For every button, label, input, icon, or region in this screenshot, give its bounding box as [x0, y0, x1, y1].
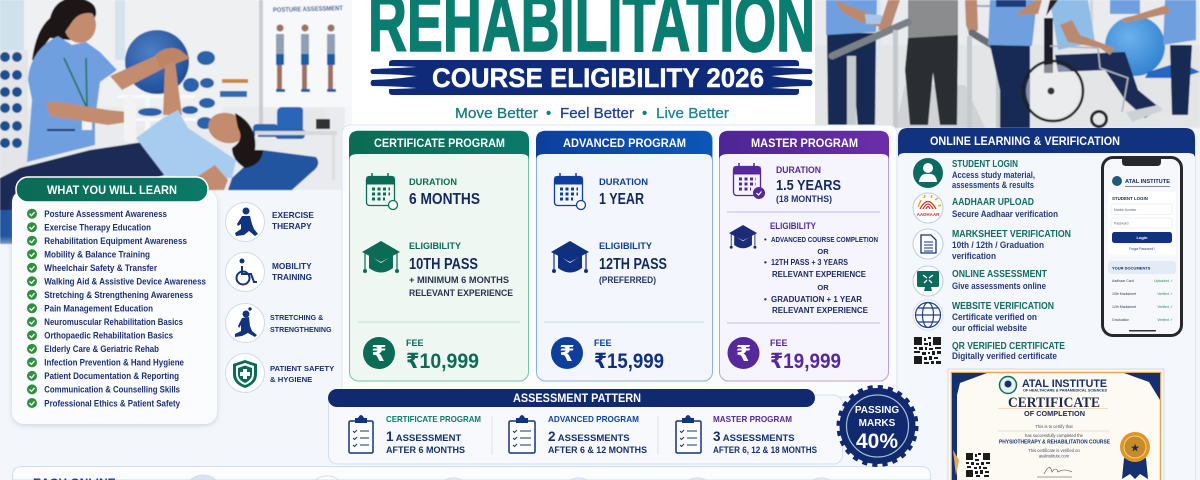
- text: duration: (18 MONTHS): [776, 194, 832, 204]
- label: exercise therapy: EXERCISE: [272, 210, 314, 220]
- phone: student login screen: [1101, 156, 1183, 337]
- text: student login: assessments & results: [952, 180, 1034, 190]
- text: duration: [409, 177, 480, 208]
- text: aadhaar upload: AADHAAR UPLOAD: [952, 197, 1034, 208]
- photo: therapist assisting a patient: [0, 0, 352, 254]
- phone: student login screen: STUDENT LOGIN: [1112, 196, 1148, 201]
- assessment: master program: MASTER PROGRAM: [713, 414, 792, 424]
- text: online assessment: ONLINE ASSESSMENT: [952, 269, 1047, 280]
- text: eligibility options: 12TH PASS + 3 YEARS: [771, 258, 849, 267]
- text: website verification: [952, 301, 1054, 333]
- text: eligibility options: •: [764, 295, 767, 304]
- heading: online learning and verification: ONLINE LEARNING & VERIFICATION: [930, 134, 1120, 148]
- patient standing: [908, 0, 958, 40]
- text: duration: DURATION: [599, 177, 648, 188]
- label: mobility training: MOBILITY: [272, 261, 312, 271]
- certificate institute name: OF HEALTHCARE & PARAMEDICAL SCIENCES: [1023, 388, 1108, 392]
- text: duration: DURATION: [409, 177, 457, 188]
- phone: student login screen: Login: [1137, 235, 1148, 240]
- list: learning topics: Walking Aid & Assistive Device Awareness: [44, 277, 206, 287]
- assessment: advanced program: [509, 414, 647, 455]
- certificate body text: atalinstitute.com: [1039, 454, 1070, 458]
- text: eligibility: + MINIMUM 6 MONTHS: [409, 275, 509, 285]
- text: aadhaar upload: [952, 197, 1058, 219]
- tagline: •: [546, 105, 551, 122]
- certificate body text: has successfully completed the: [1025, 433, 1084, 438]
- phone: student login screen: YOUR DOCUMENTS: [1112, 266, 1151, 270]
- certificate medal: ★: [1130, 442, 1140, 454]
- phone: student login screen: Forgot Password?: [1129, 247, 1155, 251]
- text: duration: DURATION: [776, 165, 821, 176]
- poster: posture assessment: POSTURE ASSESSMENT: [273, 5, 343, 14]
- text: marksheet verification: [952, 229, 1071, 261]
- assessment: advanced program: ADVANCED PROGRAM: [548, 414, 639, 424]
- phone: student login screen: Password: [1114, 222, 1129, 226]
- label: patient safety and hygiene: & HYGIENE: [270, 375, 312, 384]
- list: learning topics: Elderly Care & Geriatric Rehab: [44, 344, 160, 354]
- tagline: [455, 105, 729, 122]
- banner: course eligibility: [370, 60, 812, 95]
- assessment: master program: [676, 414, 817, 455]
- text: eligibility options: •: [764, 258, 767, 267]
- text: student login: Access study material,: [952, 170, 1035, 180]
- text: qr verified certificate: QR VERIFIED CERTIFICATE: [952, 341, 1065, 352]
- text: eligibility options: OR: [817, 283, 829, 292]
- fee: 19,999: [728, 337, 841, 373]
- poster: posture assessment: [263, 0, 352, 107]
- icon: calendar: [554, 173, 586, 210]
- panel: master program: [719, 131, 889, 381]
- text: eligibility: ELIGIBILITY: [599, 241, 653, 252]
- check marks: [27, 209, 37, 408]
- icon: patient safety shield: [226, 354, 264, 392]
- label: exercise therapy: THERAPY: [272, 221, 312, 231]
- fee: 15,999: ₹15,999: [594, 350, 664, 373]
- fee: 10,999: FEE: [406, 338, 424, 348]
- heading: what you will learn: WHAT YOU WILL LEARN: [47, 183, 177, 197]
- patient: [163, 62, 182, 115]
- text: eligibility: [599, 241, 667, 285]
- certificate title: [998, 395, 1108, 418]
- list: learning topics: Neuromuscular Rehabilitation Basics: [44, 317, 183, 327]
- text: online assessment: Give assessments online: [952, 281, 1046, 291]
- couch: [228, 150, 318, 190]
- text: eligibility options: GRADUATION + 1 YEAR: [771, 295, 862, 304]
- phone: student login screen: Verified ✓: [1157, 318, 1173, 322]
- fee: 19,999: FEE: [770, 338, 788, 348]
- fee: 15,999: [551, 337, 664, 373]
- heading: master program: MASTER PROGRAM: [751, 136, 858, 150]
- icon: stretching and strengthening: [226, 304, 264, 342]
- icon: graduation cap: [729, 225, 757, 249]
- list: learning topics: Pain Management Education: [44, 304, 153, 314]
- badge: passing marks 40%: MARKS: [859, 418, 896, 429]
- certificate body text: PHYSIOTHERAPY & REHABILITATION COURSE: [999, 440, 1111, 446]
- panel: advanced program: [536, 131, 712, 381]
- text: duration: [776, 165, 841, 204]
- certificate title: CERTIFICATE: [1008, 395, 1100, 411]
- icon: mobility training: [226, 252, 264, 292]
- tagline: Live Better: [656, 105, 729, 122]
- badge: passing marks 40%: 40%: [856, 430, 898, 453]
- fee: 15,999: FEE: [594, 338, 612, 348]
- tagline: Feel Better: [560, 105, 634, 122]
- therapist: [32, 0, 96, 60]
- icon: online assessment monitor: [913, 266, 943, 296]
- phone: student login screen: Mobile Number: [1114, 208, 1137, 212]
- text: eligibility options: ADVANCED COURSE COMPLETION: [771, 235, 878, 244]
- text: eligibility options: •: [764, 235, 767, 244]
- list: learning topics: Communication & Counselling Skills: [44, 385, 180, 395]
- icon: calendar with check: [734, 163, 764, 198]
- panel: bottom strip: [12, 466, 930, 480]
- label: stretching and strengthening: STRENGTHENING: [270, 326, 332, 334]
- icon: website globe: [913, 300, 943, 330]
- text: qr verified certificate: Digitally verified certificate: [952, 351, 1057, 361]
- certificate medal: [1120, 432, 1150, 479]
- text: duration: 1.5 YEARS: [776, 177, 841, 194]
- badge: passing marks 40%: [838, 387, 916, 465]
- icon: aadhaar: [913, 193, 943, 223]
- assessment: advanced program: AFTER 6 & 12 MONTHS: [548, 445, 647, 455]
- label: patient safety and hygiene: PATIENT SAFETY: [270, 364, 334, 373]
- icon: qr code: [914, 337, 941, 364]
- list: learning topics: Patient Documentation & Reporting: [44, 371, 179, 381]
- list: learning topics: Stretching & Strengthening Awareness: [44, 290, 193, 300]
- fee: 10,999: [363, 337, 479, 373]
- phone: student login screen: 10th Marksheet: [1112, 292, 1136, 296]
- photo: gait training and wheelchair support: [815, 0, 1200, 128]
- icons: cropped circles: [190, 475, 829, 480]
- text: aadhaar upload: Secure Aadhaar verification: [952, 209, 1058, 219]
- assessment: master program: AFTER 6, 12 & 18 MONTHS: [713, 445, 817, 455]
- text: eligibility options: RELEVANT EXPERIENCE: [772, 270, 867, 279]
- certificate body text: This certificate is verified on: [1028, 448, 1081, 453]
- phone: student login screen: Verified ✓: [1157, 292, 1173, 296]
- panel: certificate program: [349, 131, 529, 381]
- label: mobility training: TRAINING: [272, 272, 312, 282]
- certificate title: OF COMPLETION: [1024, 411, 1085, 418]
- fee: 10,999: ₹: [371, 341, 387, 366]
- list: learning topics: Orthopaedic Rehabilitation Basics: [44, 331, 173, 341]
- text: marksheet verification: verification: [952, 251, 996, 261]
- text: eligibility: 12TH PASS: [599, 256, 667, 273]
- text: eligibility options: RELEVANT EXPERIENCE: [772, 306, 869, 315]
- phone: student login screen: Verified ✓: [1157, 305, 1173, 309]
- heading: assessment pattern: ASSESSMENT PATTERN: [513, 393, 641, 405]
- staff left: [827, 33, 876, 128]
- text: student login: STUDENT LOGIN: [952, 159, 1018, 170]
- heading: advanced program: ADVANCED PROGRAM: [563, 136, 686, 150]
- fee: 15,999: ₹: [559, 341, 575, 366]
- certificate body text: [998, 424, 1111, 458]
- assessment: certificate program: CERTIFICATE PROGRAM: [386, 414, 481, 424]
- text: duration: 1 YEAR: [599, 191, 644, 208]
- certificate institute name: ATAL INSTITUTE: [1022, 378, 1107, 390]
- text: eligibility: 10TH PASS: [409, 256, 478, 273]
- list: learning topics: Exercise Therapy Education: [44, 222, 151, 232]
- phone: student login screen: Uploaded ✓: [1154, 279, 1173, 283]
- phone: student login screen: Graduation: [1112, 318, 1129, 322]
- text: online assessment: [952, 269, 1047, 291]
- list: learning topics: Infection Prevention & Hand Hygiene: [44, 358, 184, 368]
- text: duration: [599, 177, 648, 208]
- icon: student login: [913, 158, 943, 188]
- text: duration: 6 MONTHS: [409, 191, 480, 208]
- tagline: Move Better: [455, 105, 538, 122]
- assessment: certificate program: AFTER 6 MONTHS: [386, 445, 465, 455]
- assessment: advanced program: 2 ASSESSMENTS: [548, 429, 630, 444]
- tagline: •: [642, 105, 647, 122]
- assessment: certificate program: [349, 414, 481, 455]
- text: website verification: WEBSITE VERIFICATION: [952, 301, 1054, 312]
- assessment: master program: 3 ASSESSMENTS: [713, 429, 795, 444]
- certificate signature: [1037, 467, 1072, 477]
- list: learning topics: Wheelchair Safety & Transfer: [44, 263, 158, 273]
- panel: what you will learn: [12, 177, 217, 424]
- staff middle: [990, 45, 1030, 128]
- text: student login: [952, 159, 1035, 190]
- fee: 19,999: ₹19,999: [770, 350, 841, 373]
- text: eligibility: [409, 241, 513, 298]
- text: eligibility: (PREFERRED): [599, 275, 656, 285]
- certificate logo: [1000, 376, 1016, 394]
- text: eligibility options: ELIGIBILITY: [770, 221, 816, 231]
- staff right: [1170, 45, 1192, 115]
- header background: [352, 0, 815, 126]
- icon: exercise therapy: [226, 202, 264, 242]
- icon: graduation cap: [362, 241, 400, 273]
- phone: student login screen: ATAL INSTITUTE: [1125, 179, 1170, 185]
- phone: student login screen: Aadhaar Card: [1112, 279, 1134, 283]
- text: marksheet verification: 10th / 12th / Graduation: [952, 240, 1044, 250]
- icon: aadhaar: AADHAAR: [917, 212, 940, 217]
- text: website verification: our official website: [952, 323, 1027, 333]
- icon: calendar: [366, 173, 398, 210]
- phone: student login screen: 12th Marksheet: [1112, 305, 1136, 309]
- assessment: certificate program: 1 ASSESSMENT: [386, 429, 461, 444]
- icon: marksheet document: [913, 229, 943, 259]
- certificate of completion: [948, 369, 1164, 480]
- heading: certificate program: CERTIFICATE PROGRAM: [374, 136, 505, 150]
- fee: 19,999: ₹: [736, 341, 751, 366]
- wheelchair patient: [1050, 0, 1095, 50]
- icon: graduation cap: [551, 241, 589, 273]
- text: eligibility: RELEVANT EXPERIENCE: [409, 288, 513, 298]
- label: stretching and strengthening: STRETCHING &: [270, 314, 323, 322]
- rails: [832, 22, 908, 56]
- backing panel for program cards: [342, 125, 897, 397]
- banner: course eligibility: COURSE ELIGIBILITY 2026: [432, 63, 764, 93]
- text: marksheet verification: MARKSHEET VERIFICATION: [952, 229, 1071, 240]
- panel: online learning and verification: [898, 128, 1196, 480]
- certificate body text: This is to certify that: [1035, 424, 1073, 429]
- list: learning topics: Mobility & Balance Training: [44, 250, 150, 260]
- list: learning topics: Professional Ethics & Patient Safety: [44, 398, 180, 408]
- text: eligibility: ELIGIBILITY: [409, 241, 462, 252]
- text: eligibility options: OR: [817, 247, 829, 256]
- list: learning topics: Posture Assessment Awareness: [44, 209, 167, 219]
- text: qr verified certificate: [952, 341, 1065, 361]
- list: learning topics: Rehabilitation Equipment Awareness: [44, 236, 187, 246]
- certificate qr code: [966, 453, 990, 477]
- text: website verification: Certificate verified on: [952, 312, 1037, 322]
- badge: passing marks 40%: PASSING: [855, 405, 899, 416]
- text: eligibility options: [764, 221, 878, 315]
- panel: assessment pattern: [328, 389, 842, 464]
- list: learning topics: [44, 209, 206, 408]
- fee: 10,999: ₹10,999: [406, 350, 479, 373]
